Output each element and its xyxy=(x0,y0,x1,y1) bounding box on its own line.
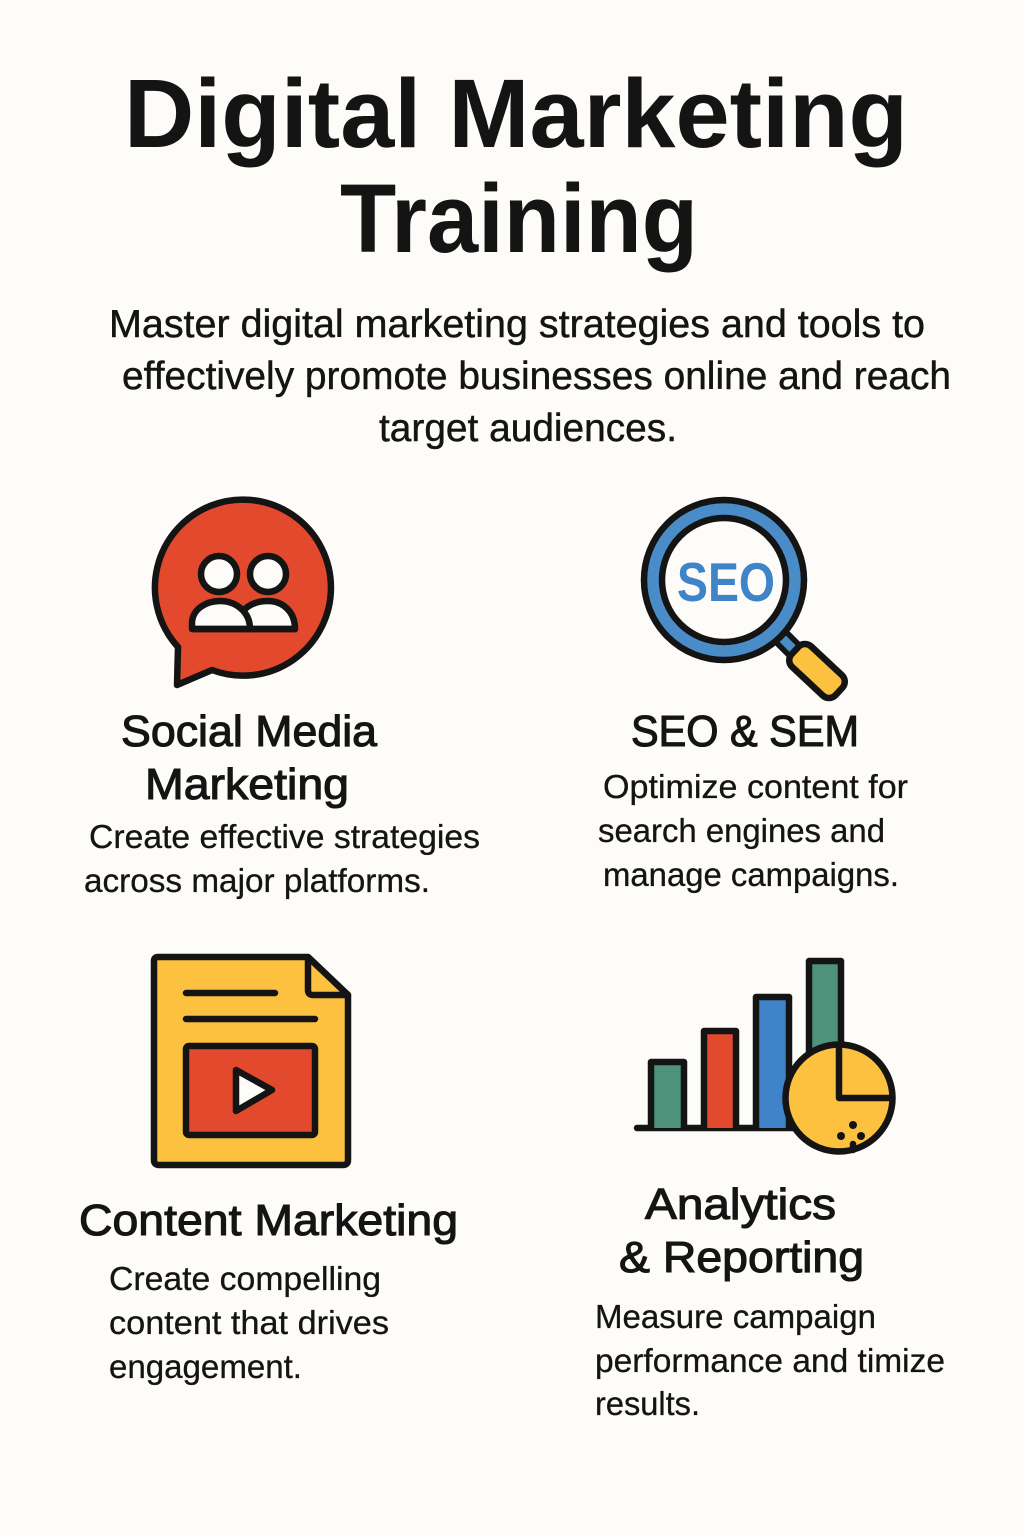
subtitle: Master digital marketing strategies and tools to xyxy=(109,303,925,346)
icon: document with video xyxy=(154,957,348,1165)
text: seo description xyxy=(598,768,908,893)
subtitle: effectively promote businesses online and reach xyxy=(122,355,951,398)
text: content description: Create compelling xyxy=(109,1260,381,1297)
subtitle: target audiences. xyxy=(379,407,677,450)
panel: content marketing xyxy=(79,957,458,1385)
title: Training xyxy=(340,164,698,273)
text: analytics description xyxy=(595,1298,945,1422)
icon: bar chart with pie xyxy=(637,961,892,1152)
panel: social media marketing xyxy=(84,500,480,899)
title xyxy=(124,59,908,273)
panel: seo and sem xyxy=(598,500,908,893)
text: social media description: across major platforms. xyxy=(84,862,430,899)
text: content description: content that drives xyxy=(109,1304,389,1341)
heading: analytics and reporting xyxy=(619,1180,864,1282)
text: seo description: manage campaigns. xyxy=(603,856,899,893)
text: social media description xyxy=(84,818,480,899)
heading: social media marketing: Social Media xyxy=(121,707,378,756)
text: content description xyxy=(109,1260,389,1385)
heading: analytics and reporting: & Reporting xyxy=(619,1233,864,1282)
title: Digital Marketing xyxy=(124,59,908,168)
text: seo description: search engines and xyxy=(598,812,885,849)
icon text: SEO: SEO xyxy=(677,551,775,613)
subtitle xyxy=(109,303,951,450)
icon: magnifying glass xyxy=(644,500,848,702)
text: content description: engagement. xyxy=(109,1348,302,1385)
heading: social media marketing xyxy=(121,707,378,809)
heading: seo and sem: SEO & SEM xyxy=(631,707,859,756)
text: analytics description: Measure campaign xyxy=(595,1298,876,1335)
icon: speech bubble with people xyxy=(155,500,331,685)
text: analytics description: results. xyxy=(595,1385,700,1422)
text: social media description: Create effective strategies xyxy=(89,818,480,855)
text: seo description: Optimize content for xyxy=(603,768,908,805)
heading: analytics and reporting: Analytics xyxy=(645,1180,836,1229)
heading: content marketing: Content Marketing xyxy=(79,1196,458,1245)
heading: social media marketing: Marketing xyxy=(145,760,349,809)
text: analytics description: performance and timize xyxy=(595,1342,945,1379)
panel: analytics and reporting xyxy=(595,961,945,1422)
